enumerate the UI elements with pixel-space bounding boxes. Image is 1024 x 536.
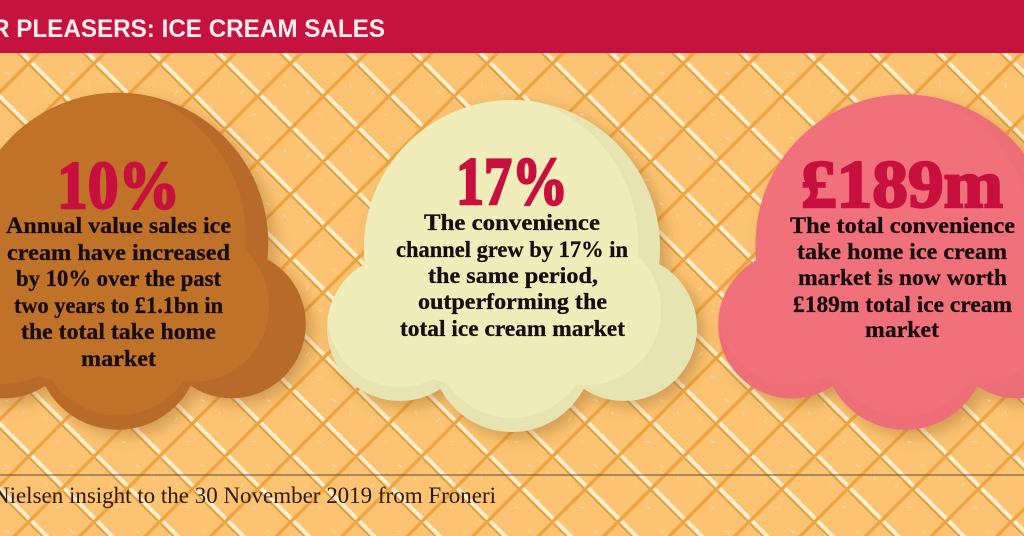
17% description: channel grew by 17% in	[396, 237, 628, 263]
£189m description: £189m total ice cream	[793, 292, 1012, 318]
10% description: by 10% over the past	[16, 266, 221, 292]
£189m description: The total convenience	[790, 213, 1015, 239]
10% description: market	[81, 346, 156, 372]
£189m description: market is now worth	[798, 265, 1007, 291]
brown scoop shape	[0, 87, 306, 430]
cream scoop shape	[327, 94, 697, 432]
10% description: the total take home	[21, 319, 216, 345]
£189m figure: £189m	[801, 146, 1003, 222]
10% description	[6, 213, 231, 372]
panel: £189m scoop	[718, 88, 1024, 430]
10% description: Annual value sales ice	[6, 213, 231, 239]
17% description: The convenience	[424, 210, 600, 236]
10% description: cream have increased	[7, 240, 230, 266]
17% figure: 17%	[456, 143, 568, 219]
source divider	[0, 474, 1024, 476]
source note: Nielsen insight to the 30 November 2019 from Froneri	[0, 483, 496, 508]
£189m description: take home ice cream	[797, 239, 1007, 265]
17% description: the same period,	[428, 263, 598, 289]
header banner	[0, 0, 1024, 53]
pink scoop shape	[718, 88, 1024, 430]
17% description: outperforming the	[418, 289, 607, 315]
£189m description	[790, 213, 1015, 343]
10% figure: 10%	[57, 147, 180, 223]
panel: 10% scoop	[0, 87, 306, 430]
£189m description: market	[865, 317, 939, 343]
17% description: total ice cream market	[400, 316, 625, 342]
header title: R PLEASERS: ICE CREAM SALES	[0, 15, 385, 43]
17% description	[396, 210, 628, 342]
panel: 17% scoop	[327, 94, 697, 432]
10% description: two years to £1.1bn in	[14, 293, 223, 319]
